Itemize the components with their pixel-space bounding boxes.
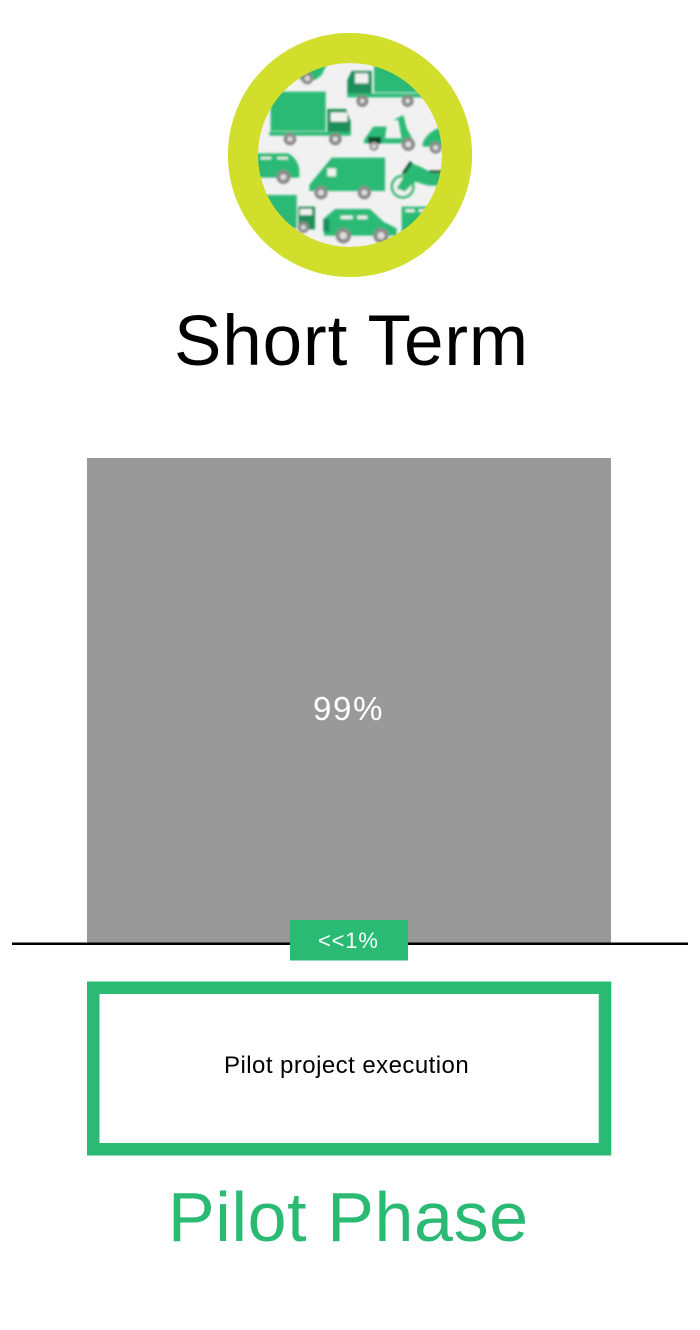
panel: pilot project execution bbox=[93, 988, 605, 1149]
scooter bbox=[364, 115, 415, 151]
top-right truck bbox=[346, 66, 423, 108]
motorcycle bbox=[392, 161, 443, 197]
bottom-right van bbox=[400, 204, 427, 232]
badge ring bbox=[243, 48, 457, 262]
bar: under 1% share bbox=[290, 920, 408, 960]
baseline axis bbox=[12, 942, 688, 945]
centre van bbox=[309, 158, 385, 199]
large truck bbox=[269, 92, 351, 145]
right car bbox=[423, 127, 443, 154]
vehicle illustrations bbox=[257, 62, 443, 243]
label: <<1%: <<1% bbox=[318, 928, 379, 953]
heading: Pilot Phase: Pilot Phase bbox=[168, 1178, 529, 1256]
bar: 99% share bbox=[87, 458, 611, 943]
top-left car bbox=[298, 65, 327, 84]
bottom car bbox=[323, 209, 397, 243]
heading: Short Term: Short Term bbox=[174, 302, 529, 381]
icon: vehicles badge bbox=[243, 48, 457, 262]
panel text: Pilot project execution bbox=[224, 1052, 469, 1079]
left van bbox=[257, 153, 299, 184]
bottom-left truck bbox=[257, 195, 315, 233]
label: 99%: 99% bbox=[313, 690, 384, 727]
